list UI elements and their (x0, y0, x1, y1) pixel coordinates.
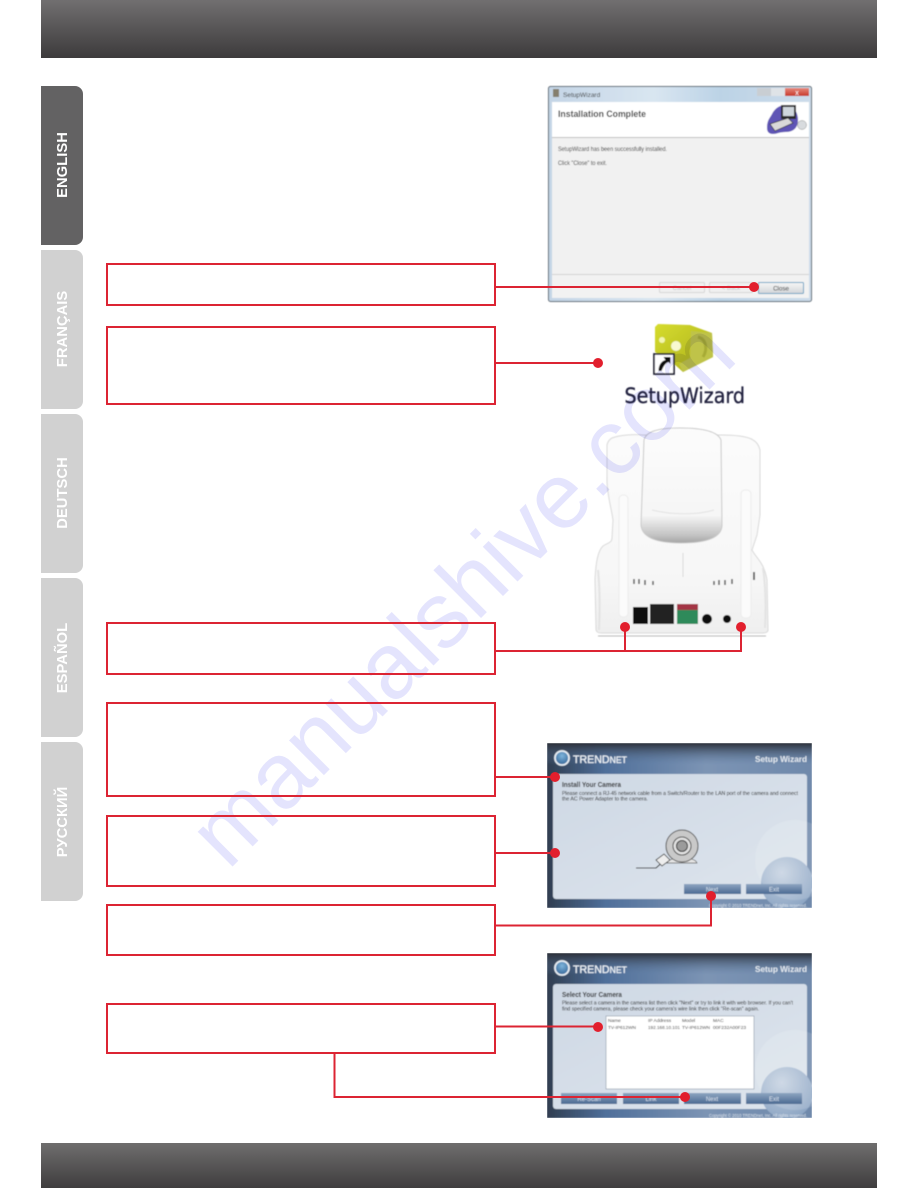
screenshot: select your camera: find specified camera, please check your camera's wire link then click "Re-scan" again. (562, 1006, 759, 1012)
screenshot: installation complete window: Cancel (673, 286, 691, 292)
logo (555, 751, 627, 766)
arrow: to camera list (495, 1026, 598, 1028)
screenshot: install your camera: Exit (769, 888, 779, 894)
callout 4 (107, 703, 495, 796)
icon label: SetupWizard (624, 384, 745, 409)
window buttons (660, 282, 704, 292)
screenshot: select your camera: Next (706, 1097, 718, 1103)
dot: left antenna (620, 622, 630, 632)
screenshot: installation complete window: Close (773, 286, 789, 292)
callout 1 (107, 264, 495, 305)
screen instructions: Please connect a RJ-45 network cable from a Switch/Router to the LAN port of the camera and connect (562, 791, 798, 797)
logo: TRENDNET (573, 964, 627, 976)
screen buttons (684, 884, 741, 894)
screenshot: install your camera: the AC Power Adapter to the camera. (562, 796, 648, 802)
tab: Français (41, 250, 83, 409)
screenshot: install your camera (547, 743, 835, 909)
logo (555, 961, 627, 976)
watermark: manualshive.com (169, 300, 754, 885)
callout 7 (107, 1004, 495, 1053)
icon: SetupWizard shortcut (624, 324, 745, 409)
screenshot: installation complete window (548, 86, 812, 302)
tab: Deutsch: DEUTSCH (55, 457, 71, 529)
screen buttons (561, 1093, 617, 1104)
tab: Russian (41, 742, 83, 901)
callout 6 (107, 905, 495, 955)
screen instructions: Please select a camera in the camera list then click "Next" or try to link it with web browser. If you can't (562, 1000, 793, 1006)
connector dots (550, 282, 759, 1102)
dot: camera list (593, 1022, 603, 1032)
footer bar (41, 1143, 877, 1188)
camera list (606, 1016, 754, 1089)
screenshot: installation complete window: Click "Close" to exit. (558, 161, 607, 167)
ports (633, 607, 648, 624)
screenshot: select your camera: Copyright © 2010 TRENDnet, Inc. All rights reserved. (709, 1112, 807, 1118)
callout 5 (107, 816, 495, 886)
dot: Close (749, 282, 759, 292)
arrow: to Next button (495, 896, 711, 926)
screenshot: select your camera: Re-Scan (577, 1097, 601, 1103)
camera list: 00F232A00F23 (713, 1025, 746, 1031)
tab: Español: ESPAÑOL (53, 623, 71, 693)
camera list: IP Address (648, 1018, 672, 1024)
tab: Russian: РУССКИЙ (53, 787, 71, 857)
logo: TRENDNET (573, 754, 627, 766)
screenshot: installation complete window: x (795, 90, 799, 97)
screenshot: select your camera: Setup Wizard (755, 964, 807, 974)
tab: English: ENGLISH (55, 132, 71, 198)
language tabs (41, 86, 83, 901)
screenshot: install your camera: Copyright © 2010 TRENDnet, Inc. All rights reserved. (709, 902, 807, 908)
icon: computer (767, 105, 806, 134)
screenshot: installation complete window: < Back (722, 286, 741, 292)
camera list: 192.168.10.101 (648, 1025, 680, 1031)
screenshot: select your camera: Exit (769, 1097, 779, 1103)
dot: install body (550, 848, 560, 858)
vents (634, 579, 732, 585)
screen heading: Install Your Camera (562, 780, 622, 789)
screen heading: Select Your Camera (562, 990, 623, 999)
tab: Français: FRANÇAIS (55, 291, 71, 367)
camera list: TV-IP612WN (682, 1025, 711, 1031)
dot: right antenna (736, 622, 746, 632)
camera list: Name (608, 1018, 621, 1024)
window title: SetupWizard (563, 92, 601, 99)
screenshot: select your camera: Link (645, 1097, 657, 1103)
arrow: to shortcut icon (495, 362, 598, 364)
arrow: to select Next button (334, 1053, 686, 1097)
camera list: Model (682, 1018, 695, 1024)
window text: SetupWizard has been successfully installed. (558, 147, 667, 153)
arrow: to antennas (495, 627, 741, 651)
dot: icon (593, 358, 603, 368)
callout boxes (107, 264, 495, 1053)
dot: install heading (550, 772, 560, 782)
camera list: TV-IP612WN (608, 1025, 637, 1031)
camera list: MAC (713, 1018, 724, 1024)
header bar (41, 0, 877, 58)
window heading: Installation Complete (558, 109, 646, 119)
icon: webcam (636, 830, 698, 868)
connector lines (334, 287, 754, 1097)
photo: camera rear view (595, 428, 768, 636)
dot: install Next (706, 891, 716, 901)
callout 2 (107, 327, 495, 404)
arrow: to Close button (495, 286, 754, 288)
arrow: to install screen (495, 776, 555, 778)
tab: Español (41, 578, 83, 737)
screenshot: install your camera: Next (706, 888, 718, 894)
tab: Deutsch (41, 414, 83, 573)
screenshot: install your camera: Setup Wizard (755, 754, 807, 764)
screenshot: select your camera (547, 953, 835, 1119)
tab: English (41, 86, 83, 245)
arrow: to install screen body (495, 852, 555, 854)
dot: select Next (680, 1092, 690, 1102)
callout 3 (107, 623, 495, 674)
